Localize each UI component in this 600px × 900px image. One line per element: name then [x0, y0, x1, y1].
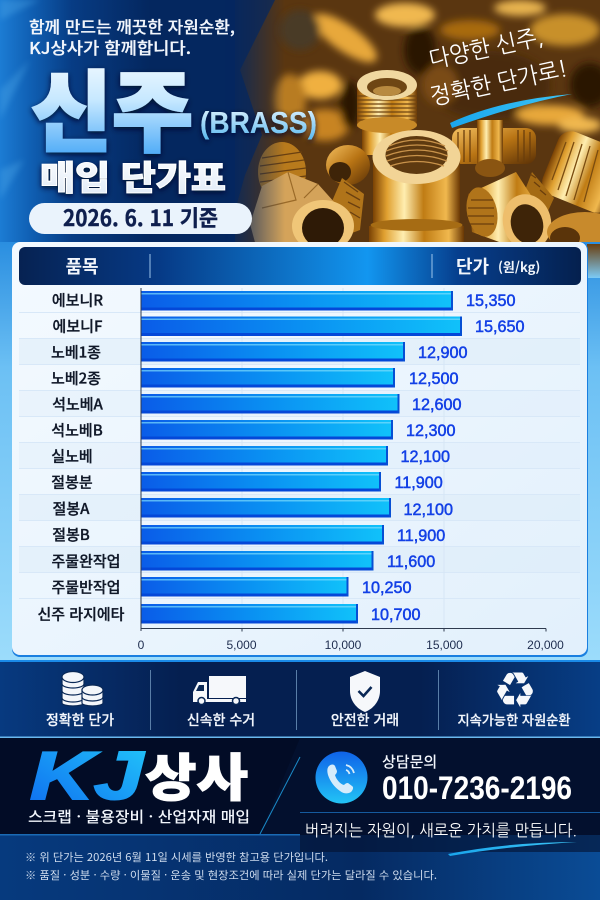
- bar: 에보니R: [141, 291, 453, 310]
- icon: coins: [62, 672, 103, 706]
- swoosh under slogan: [450, 94, 572, 128]
- item labels: 석노베B: [51, 420, 103, 440]
- handwritten slogan: 버려지는 자원이, 새로운 가치를 만듭니다.: [305, 822, 577, 839]
- brass fittings photo: [235, 0, 600, 255]
- bar: 노베2종: [141, 368, 395, 388]
- panel: price table: [0, 242, 600, 662]
- x axis: 0: [138, 638, 145, 652]
- value labels: 12,600: [412, 396, 462, 414]
- value labels: 15,650: [475, 318, 525, 336]
- bar: 석노베A: [141, 394, 400, 414]
- value labels: 11,900: [397, 527, 445, 545]
- fitting: T piece: [452, 120, 536, 177]
- value labels: 12,100: [400, 448, 450, 466]
- value labels: 11,900: [394, 474, 443, 492]
- table header: [19, 247, 581, 285]
- icon: truck: [193, 676, 246, 704]
- item labels: 실노베: [51, 446, 93, 466]
- value labels: 12,100: [404, 501, 453, 519]
- fitting: left threaded pieces: [250, 142, 370, 252]
- value labels: 11,600: [387, 553, 435, 571]
- heading: 신주: 신주: [31, 43, 193, 170]
- callout: handwritten slogan: 정확한 단가로!: [428, 56, 570, 109]
- bar: 에보니F: [141, 316, 462, 336]
- table header: (원/kg): [498, 257, 540, 276]
- table header: 품목: [65, 253, 99, 279]
- x axis: 5,000: [226, 638, 257, 652]
- date pill: 2026. 6. 11 기준: [63, 201, 218, 233]
- item labels: 주물완작업: [51, 550, 121, 572]
- item labels: 에보니R: [52, 290, 103, 310]
- icon: recycle: ♻: [493, 662, 537, 719]
- company tagline: 스크랩 · 불용장비 · 산업자재 매입: [28, 806, 250, 827]
- panel: company band: [0, 737, 600, 852]
- contact label: 상담문의: [382, 751, 437, 772]
- item labels: 석노베A: [52, 394, 104, 414]
- table rows background: [19, 288, 580, 628]
- panel: features band: [0, 660, 600, 738]
- left fade over photo: [225, 0, 285, 246]
- phone number: 010-7236-2196: [382, 770, 572, 806]
- left blue streaks: [0, 0, 40, 200]
- icon: shield: [350, 671, 380, 712]
- value labels: 15,350: [466, 292, 516, 310]
- bar: 신주 라지에타: [141, 604, 358, 624]
- navy diagonal overlay: [225, 0, 275, 246]
- fitting: back threaded collar: [357, 70, 417, 155]
- heading: 매입 단가표: 매입 단가표: [40, 151, 226, 200]
- item labels: [37, 290, 125, 624]
- panel: footer notes: ※ 품질 · 성분 · 수량 · 이물질 · 운송 및 현장조건에 따라 실제 단가는 달라질 수 있습니다.: [25, 867, 437, 883]
- feature label: safe deal: 안전한 거래: [331, 710, 399, 730]
- value labels: 12,300: [406, 422, 456, 440]
- headline: intro copy: 함께 만드는 깨끗한 자원순환,: [29, 14, 235, 38]
- x axis: 15,000: [426, 638, 463, 652]
- bar: 실노베: [141, 446, 388, 466]
- company logo: KJ: [30, 738, 145, 814]
- item labels: 절봉B: [52, 524, 90, 545]
- bar: 주물반작업: [141, 577, 348, 596]
- feature label: fast collection: 신속한 수거: [187, 710, 255, 730]
- bar: 노베1종: [141, 342, 405, 362]
- company logo: 상사: [145, 737, 248, 811]
- item labels: 절봉분: [51, 472, 93, 492]
- icon: phone: [316, 752, 368, 804]
- divider glow: [300, 812, 600, 813]
- bar: 주물완작업: [141, 551, 374, 570]
- item labels: 노베2종: [51, 368, 101, 388]
- bar: 절봉A: [141, 498, 391, 518]
- heading: BRASS: (BRASS): [200, 105, 317, 140]
- swoosh under tagline: [448, 842, 577, 856]
- item labels: 노베1종: [51, 342, 101, 362]
- value labels: 12,900: [418, 344, 468, 362]
- item labels: 주물반작업: [51, 576, 121, 598]
- value labels: 12,500: [409, 370, 459, 388]
- bar: 석노베B: [141, 420, 393, 440]
- company logo: [30, 737, 248, 814]
- value labels: [362, 292, 525, 624]
- item labels: 에보니F: [53, 316, 102, 336]
- value labels: 10,700: [371, 606, 421, 624]
- item labels: 신주 라지에타: [37, 604, 125, 624]
- value labels: 10,250: [362, 579, 412, 597]
- x axis: [138, 288, 564, 652]
- panel: footer notes: ※ 위 단가는 2026년 6월 11일 시세를 반영한 참고용 단가입니다.: [25, 849, 328, 865]
- callout: handwritten slogan: 다양한 신주,: [427, 25, 545, 72]
- callout: handwritten slogan: [427, 25, 570, 109]
- feature label: sustainable: 지속가능한 자원순환: [458, 709, 570, 729]
- bar: 절봉분: [141, 472, 381, 492]
- fitting: main front bushing: [369, 130, 464, 246]
- fitting: lower right: [466, 172, 600, 242]
- headline: intro copy: [29, 14, 235, 59]
- headline: intro copy: KJ상사가 함께합니다.: [29, 35, 191, 59]
- table header: 단가: [456, 253, 490, 279]
- feature label: accurate price: 정확한 단가: [46, 710, 114, 730]
- item labels: 절봉A: [53, 498, 90, 519]
- bar chart: [141, 291, 462, 624]
- bar: 절봉B: [141, 525, 384, 544]
- fitting: right ribbed cylinder: [542, 131, 600, 213]
- panel: footer notes: [0, 835, 600, 900]
- x axis: 10,000: [325, 638, 362, 652]
- x axis: 20,000: [527, 638, 564, 652]
